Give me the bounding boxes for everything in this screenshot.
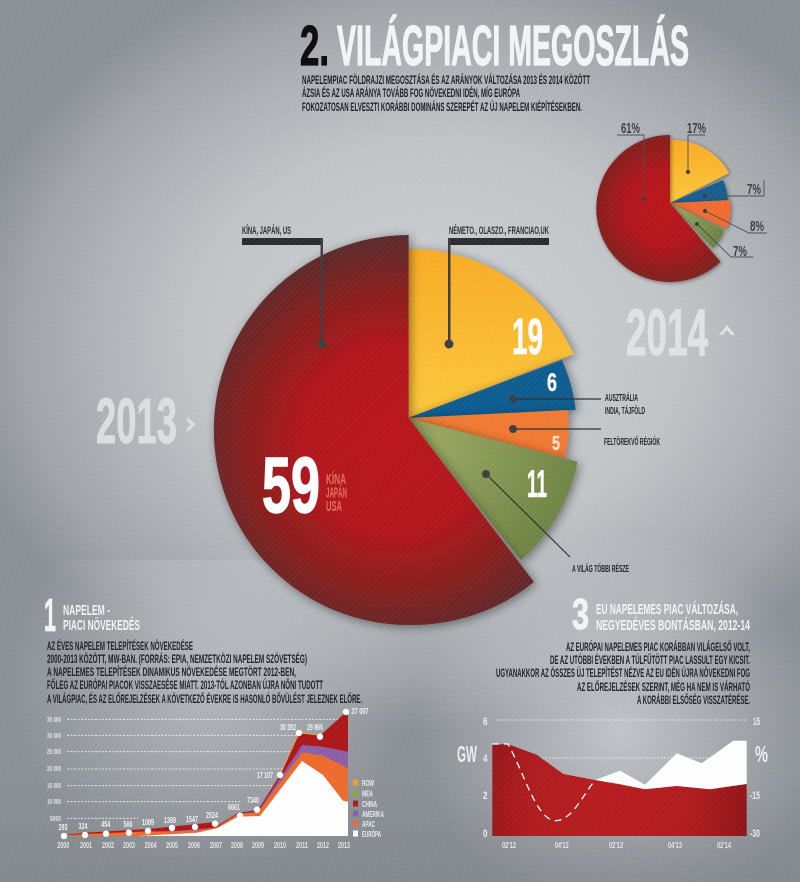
right axis: 15 — [753, 716, 760, 728]
callout: Ausztrália, India, Tájföld: AUSZTRÁLIA — [605, 391, 638, 404]
x axis labels: 2009 — [252, 840, 264, 850]
pie label: Kína Japán USA — [326, 471, 347, 515]
value labels: 37 007 — [352, 706, 369, 716]
callout: Németo., Olaszo., Franciao., UK — [444, 224, 549, 348]
x axis labels: 2000 — [57, 840, 69, 850]
labels 2014: 7% — [747, 181, 761, 198]
legend: MEA — [362, 790, 373, 798]
pie chart 2014 — [596, 135, 767, 282]
value labels: 1089 — [142, 817, 154, 827]
y axis labels: 5000 — [50, 814, 61, 823]
section 1 heading: PIACI NÖVEKEDÉS — [63, 617, 140, 634]
value labels — [58, 706, 369, 832]
x axis labels: 02'12 — [502, 840, 516, 850]
intro text — [302, 72, 590, 114]
section 1 text: FŐLEG AZ EURÓPAI PIACOK VISSZAESÉSE MIATT. 2013-TÓL AZONBAN ÚJRA NŐNI TUDOTT — [47, 677, 323, 692]
slice: Kína, Japán, USA — [214, 235, 534, 625]
chart: EU quarterly market — [457, 716, 768, 850]
x axis labels: 02'13 — [609, 840, 623, 850]
pie values 2013: 59 — [262, 440, 320, 529]
text: JAPÁN — [326, 484, 347, 502]
callout: feltörekvő régiók — [509, 425, 660, 448]
line: RoW — [280, 733, 320, 775]
value labels: 324 — [78, 821, 88, 831]
pie chart 2013 — [214, 235, 578, 625]
right axis: -30 — [750, 828, 760, 840]
right axis — [750, 716, 760, 840]
axis unit GW: GW — [457, 741, 477, 767]
legend: AMERIKA — [362, 810, 384, 819]
legend: APAC — [362, 820, 375, 829]
value labels: 454 — [101, 819, 110, 829]
callouts 2014 — [617, 135, 767, 257]
x axis labels: 2005 — [166, 840, 178, 850]
year 2014: 2014 — [626, 295, 708, 369]
left axis: 0 — [483, 828, 488, 840]
title: 2. — [300, 14, 329, 78]
text: FELTÖREKVŐ RÉGIÓK — [604, 435, 660, 448]
data points — [61, 709, 349, 839]
section 1 text: A VILÁGPIAC, ÉS AZ ELŐREJELZÉSEK A KÖVETKEZŐ ÉVEKRE IS HASONLÓ BŐVÜLÉST JELEZNEK ELŐRE. — [47, 691, 362, 706]
x axis labels: 2006 — [188, 840, 200, 850]
slice: Ausztrália, India, Tájföld — [408, 360, 576, 418]
chart: annual installations 2000-2013 — [47, 706, 384, 850]
labels 2014: 17% — [687, 120, 706, 137]
x axis labels: 2003 — [123, 840, 135, 850]
y axis labels — [47, 715, 61, 823]
text: A VILÁG TÖBBI RÉSZE — [572, 562, 629, 575]
section 3 text — [496, 639, 750, 707]
y axis labels: 30 000 — [47, 731, 61, 740]
value labels: 29 865 — [307, 722, 323, 732]
x axis labels: 04'13 — [668, 840, 682, 850]
y axis labels: 25 000 — [47, 747, 61, 756]
text: INDIA, TÁJFÖLD — [605, 404, 645, 417]
area: China — [55, 712, 348, 836]
left axis: 4 — [483, 753, 488, 765]
labels 2014: 7% — [733, 243, 747, 260]
dashed percent line — [492, 744, 595, 821]
x axis labels: 2010 — [274, 840, 286, 850]
x axis labels: 2004 — [145, 840, 157, 850]
value labels: 2524 — [206, 810, 218, 820]
area: share — [595, 741, 747, 790]
y axis labels: 10 000 — [47, 797, 61, 806]
area: APAC — [55, 752, 348, 836]
section 3 heading — [572, 590, 750, 639]
section 1 text: A NAPELEMES TELEPÍTÉSEK DINAMIKUS NÖVEKEDÉSE MEGTÖRT 2012-BEN, — [47, 664, 296, 679]
labels 2014 — [621, 120, 764, 260]
value labels: 566 — [124, 819, 133, 829]
year 2013: 2013 — [96, 385, 177, 457]
value labels: 1547 — [186, 814, 198, 824]
area: Amerika — [138, 745, 348, 836]
x axis labels: 2002 — [102, 840, 114, 850]
x axis labels: 04'12 — [555, 840, 569, 850]
x axis labels: 2013 — [338, 840, 350, 850]
callout: a világ többi része — [482, 470, 629, 575]
legend — [353, 779, 384, 839]
pie values 2013: 11 — [527, 463, 547, 506]
left axis: 6 — [483, 716, 488, 728]
left axis: 2 — [483, 790, 488, 802]
x axis labels: 02'14 — [717, 840, 731, 850]
section 1 heading: 1 — [44, 589, 56, 641]
pie values 2013: 19 — [512, 308, 543, 365]
section 1 heading — [44, 589, 140, 641]
callout: Kína, Japán, US — [242, 224, 326, 348]
pie label: Kína Japán USA: KÍNA — [326, 471, 346, 488]
slice: Németo., Olaszo., Franciao., UK — [409, 249, 574, 418]
value labels: 7340 — [247, 795, 259, 805]
area: Európa — [138, 761, 348, 836]
value labels: 293 — [58, 822, 68, 832]
x axis labels — [502, 840, 731, 850]
value labels: 30 282 — [280, 722, 296, 732]
labels 2014: 8% — [750, 218, 764, 235]
area: GW — [492, 744, 747, 836]
x axis labels: 2007 — [210, 840, 222, 850]
x axis labels: 2008 — [231, 840, 243, 850]
right axis: -15 — [750, 790, 760, 802]
section 1 heading: NAPELEM - — [63, 602, 110, 619]
intro text: ÁZSIA ÉS AZ USA ARÁNYA TOVÁBB FOG NÖVEKEDNI IDÉN, MÍG EURÓPA — [302, 85, 520, 100]
legend: CHINA — [362, 800, 377, 809]
pie label: Kína Japán USA: USA — [326, 498, 342, 515]
callout: Németo., Olaszo., Franciao., UK: NÉMETO., OLASZO., FRANCIAO,UK — [449, 224, 549, 237]
legend: EURÓPA — [362, 830, 381, 839]
section 1 text: 2000-2013 KÖZÖTT, MW-BAN. (FORRÁS: EPIA, NEMZETKÖZI NAPELEM SZÖVETSÉG) — [47, 651, 307, 666]
section 1 text — [47, 638, 362, 706]
callout: Kína, Japán, US: KÍNA, JAPÁN, US — [242, 224, 291, 237]
labels 2014: 61% — [621, 120, 640, 137]
y axis labels: 20 000 — [47, 764, 61, 773]
x axis labels — [57, 840, 350, 850]
value labels: 1389 — [164, 815, 176, 825]
value labels: 6661 — [228, 802, 240, 812]
y axis labels: 15 000 — [47, 781, 61, 790]
section 1 text: AZ ÉVES NAPELEM TELEPÍTÉSEK NÖVEKEDÉSE — [47, 638, 193, 653]
legend: ROW — [362, 779, 374, 788]
slice: feltörekvő régiók — [408, 410, 568, 458]
value labels: 17 107 — [257, 770, 273, 780]
section 3 heading: 3 — [572, 590, 589, 639]
slice: a világ többi része — [408, 418, 578, 560]
x axis labels: 2001 — [80, 840, 92, 850]
pie values 2013: 5 — [552, 433, 560, 455]
x axis labels: 2012 — [317, 840, 329, 850]
left axis — [483, 716, 488, 840]
callout: Ausztrália, India, Tájföld — [509, 391, 645, 417]
x axis labels: 2011 — [296, 840, 308, 850]
axis unit percent: % — [755, 741, 768, 767]
pie values 2013: 6 — [547, 369, 557, 397]
y axis labels: 35 000 — [47, 715, 61, 724]
pie values 2013 — [262, 308, 560, 529]
